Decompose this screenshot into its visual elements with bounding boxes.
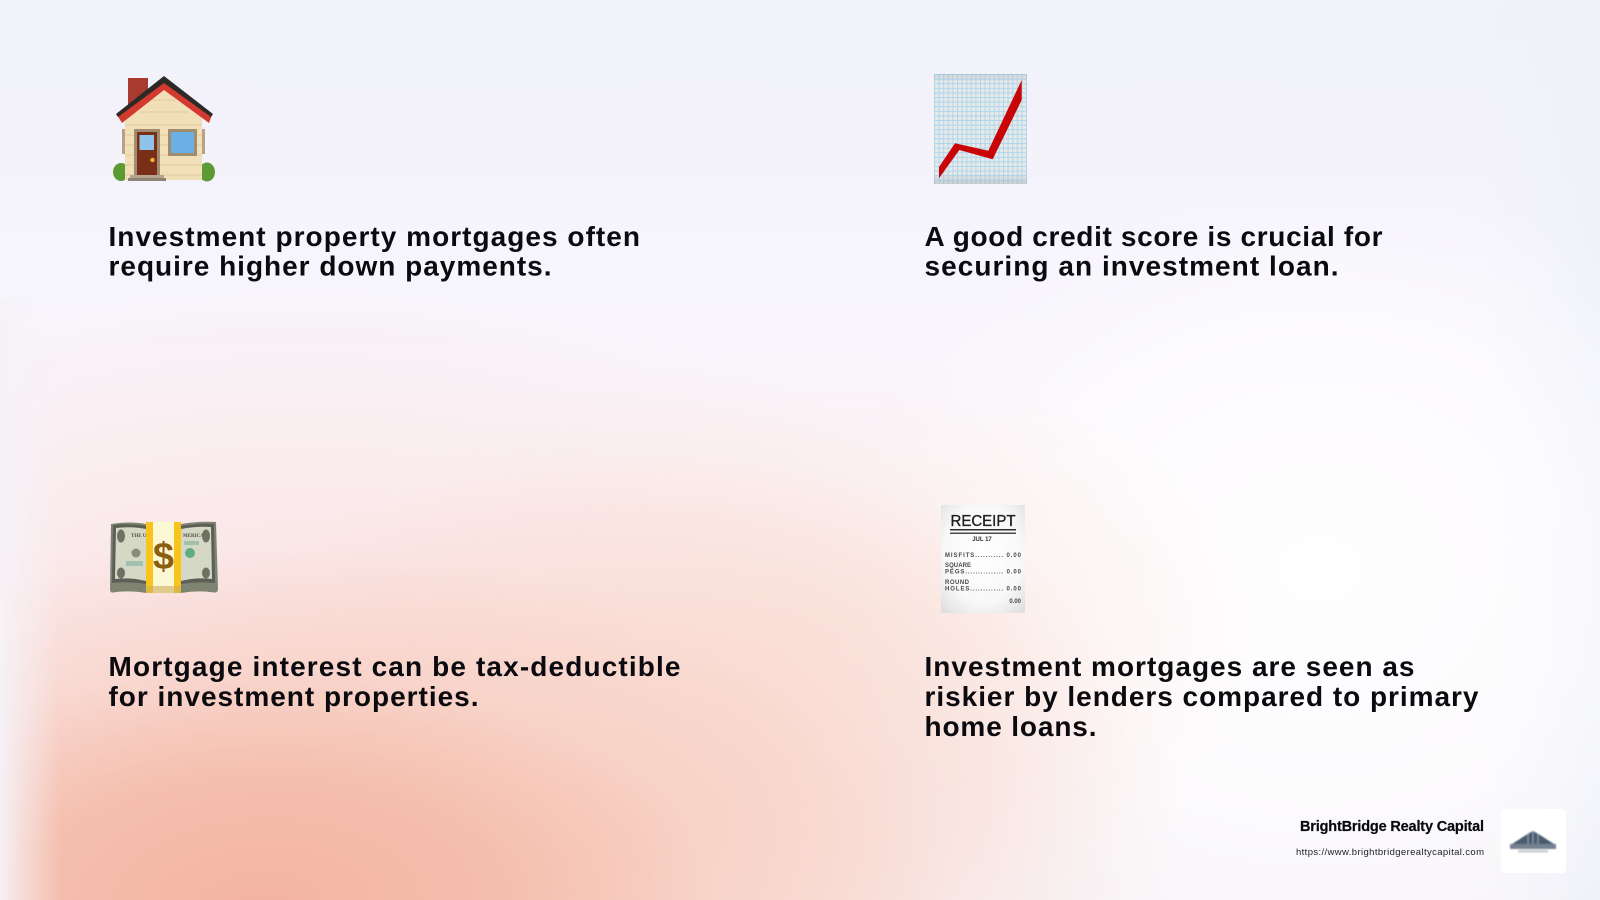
- heading: lender risk: Investment mortgages are seen as: [924, 651, 1414, 682]
- icon: receipt: SQUARE: [945, 563, 971, 569]
- icon: house: [113, 76, 215, 182]
- heading: credit score: [924, 221, 1383, 282]
- brand name and url: BrightBridge Realty Capital: [1300, 819, 1484, 835]
- icon: banknote stack: $: [153, 536, 174, 578]
- brand footer: [1296, 809, 1566, 873]
- heading: down payments: require higher down payments.: [108, 250, 552, 282]
- heading: credit score: A good credit score is crucial for: [924, 221, 1383, 252]
- icon: receipt: [941, 505, 1025, 613]
- heading: tax deductible: [108, 651, 680, 712]
- icon: receipt: ROUND: [945, 580, 970, 586]
- heading: credit score: securing an investment loan.: [924, 250, 1338, 282]
- icon: receipt: RECEIPT: [950, 513, 1016, 530]
- heading: lender risk: home loans.: [924, 711, 1096, 742]
- panel: tax deductible: [108, 522, 680, 712]
- heading: down payments: [108, 221, 640, 282]
- heading: lender risk: [924, 651, 1479, 742]
- logo: brand badge: [1501, 809, 1566, 873]
- panel: lender risk: [924, 505, 1479, 742]
- heading: tax deductible: Mortgage interest can be tax-deductible: [108, 651, 680, 682]
- icon: banknote stack: [110, 522, 218, 593]
- icon: receipt: MISFITS........... 0.00: [945, 553, 1022, 559]
- heading: lender risk: riskier by lenders compared to primary: [924, 681, 1479, 712]
- panel: down payments: [108, 76, 640, 282]
- icon: receipt: 0.00: [1009, 599, 1022, 605]
- heading: down payments: Investment property mortgages often: [108, 221, 640, 252]
- heading: tax deductible: for investment properties.: [108, 681, 478, 712]
- icon: banknote stack: THE UN: [131, 534, 150, 539]
- icon: receipt: JUL 17: [972, 537, 992, 543]
- icon: receipt: PEGS............... 0.00: [945, 570, 1022, 576]
- icon: banknote stack: MERICA: [183, 534, 204, 539]
- panel: credit score: [924, 74, 1383, 282]
- icon: rising chart: [934, 74, 1027, 184]
- brand name and url: [1296, 819, 1484, 858]
- icon: receipt: HOLES............. 0.00: [945, 586, 1022, 592]
- brand name and url: https://www.brightbridgerealtycapital.com: [1296, 847, 1484, 858]
